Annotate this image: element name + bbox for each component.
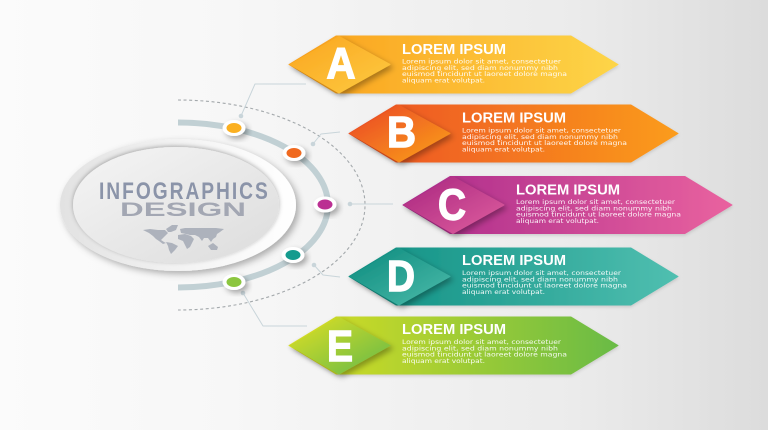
body text: Lorem ipsum dolor sit amet, consectetuer [402, 339, 562, 346]
diamond [290, 36, 390, 93]
body text: Lorem ipsum dolor sit amet, consectetuer [462, 128, 622, 134]
banner [349, 105, 678, 162]
heading: LOREM IPSUM [402, 42, 506, 58]
outer ring [60, 139, 296, 271]
body text: adipiscing elit, sed diam nonummy nibh [462, 134, 618, 141]
dashed outer arc [178, 100, 365, 310]
node: E [222, 274, 246, 290]
diamond [350, 106, 450, 162]
letter: D [387, 252, 415, 301]
icon: world map [143, 225, 224, 254]
inner disc [73, 147, 279, 263]
body text [402, 58, 567, 84]
body text [462, 128, 627, 153]
panel: C [403, 176, 732, 234]
body text: adipiscing elit, sed diam nonummy nibh [402, 65, 558, 72]
body text: adipiscing elit, sed diam nonummy nibh [462, 276, 618, 283]
body text: aliquam erat volutpat. [462, 146, 545, 153]
body text: euismod tincidunt ut laoreet dolore magna [402, 352, 567, 359]
node: D [282, 247, 304, 263]
heading: LOREM IPSUM [462, 110, 566, 126]
heading: LOREM IPSUM [462, 253, 566, 269]
body text: aliquam erat volutpat. [516, 218, 599, 225]
body text: euismod tincidunt ut laoreet dolore magna [402, 71, 567, 78]
body text: Lorem ipsum dolor sit amet, consectetuer [516, 199, 676, 206]
body text [516, 199, 681, 225]
letter: E [327, 322, 353, 371]
panel: A [289, 36, 618, 93]
connector: B [311, 132, 340, 146]
body text: Lorem ipsum dolor sit amet, consectetuer [462, 270, 622, 277]
panel: D [349, 248, 678, 305]
heading: LOREM IPSUM [516, 182, 620, 198]
heading: infographics: INFOGRAPHICS [99, 177, 268, 205]
diamond [404, 177, 504, 234]
node: C [314, 196, 336, 212]
connector: D [312, 263, 340, 277]
body text [462, 270, 627, 296]
body text: aliquam erat volutpat. [402, 77, 485, 84]
letter: B [387, 108, 416, 157]
body text [402, 339, 567, 365]
letter: A [326, 39, 356, 88]
body text: Lorem ipsum dolor sit amet, consectetuer [402, 58, 562, 66]
body text: euismod tincidunt ut laoreet dolore magna [516, 212, 681, 219]
heading: design: DESIGN [120, 200, 246, 221]
diamond [290, 318, 390, 374]
banner [289, 317, 618, 374]
connector: E [241, 291, 307, 326]
body text: adipiscing elit, sed diam nonummy nibh [402, 345, 558, 352]
body text: aliquam erat volutpat. [402, 358, 485, 365]
body text: euismod tincidunt ut laoreet dolore magna [462, 140, 627, 147]
banner [289, 36, 618, 93]
panel: B [349, 105, 678, 162]
heading: LOREM IPSUM [402, 322, 506, 338]
timeline arc [178, 122, 328, 288]
body text: euismod tincidunt ut laoreet dolore magna [462, 283, 627, 290]
central circle [60, 139, 296, 271]
banner [403, 176, 732, 234]
letter: C [438, 180, 466, 230]
node: B [282, 145, 306, 161]
node: A [222, 120, 246, 136]
body text: aliquam erat volutpat. [462, 289, 545, 296]
panel: E [289, 317, 618, 374]
connector: A [239, 84, 306, 118]
banner [349, 248, 678, 305]
body text: adipiscing elit, sed diam nonummy nibh [516, 205, 672, 212]
diamond [350, 248, 450, 305]
connector: C [348, 202, 393, 206]
